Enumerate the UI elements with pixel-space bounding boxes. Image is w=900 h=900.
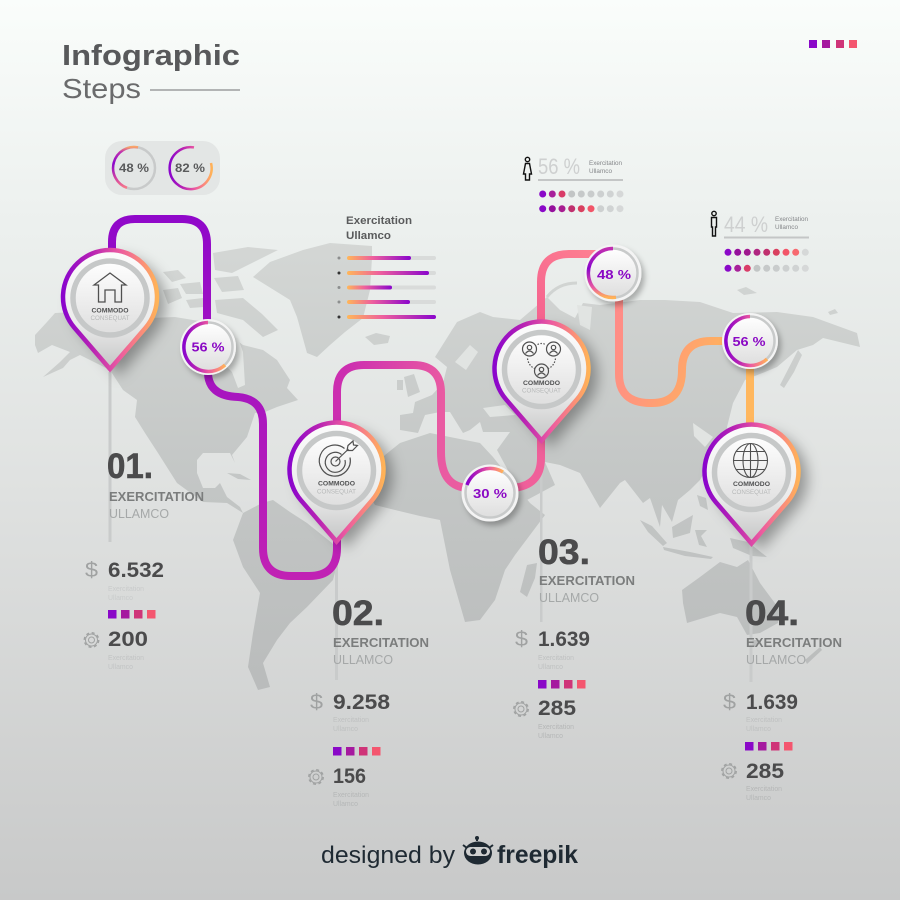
demographic panel 56 %: 56 % [538,154,580,179]
icon: person [712,211,716,236]
badge 48 % [584,244,642,302]
badge 56 % right [722,313,778,369]
bars panel: Ullamco [346,230,391,242]
step 03: Ullamco [538,662,563,671]
footer logo [321,836,578,869]
step 02: Ullamco [333,724,358,733]
step 04: Exercitation [746,715,782,724]
demographic panel 44 %: 44 % [724,212,768,237]
step 02 [309,594,429,808]
pin label: COMMODO [733,481,770,488]
pin label [732,481,771,496]
step 04: ULLAMCO [746,652,806,667]
step 02: ULLAMCO [333,652,393,667]
pin label: CONSEQUAT [90,315,130,322]
demographic panel 44 % [712,211,809,272]
step 04: $ [723,691,736,714]
step 01: Exercitation [108,584,144,593]
pin label: COMMODO [523,380,560,387]
step 03: Exercitation [538,653,574,662]
pin label: CONSEQUAT [732,489,771,496]
demographic panel 44 %: Exercitation [775,216,808,223]
badge 30 %: 30 % [473,486,507,501]
demographic panel 56 %: Exercitation [589,160,622,167]
pin 4: globe [704,425,798,544]
step 01: EXERCITATION [109,489,204,504]
step 04: 285 [746,760,784,783]
icon: gear [722,764,736,778]
icon: gear [84,633,99,647]
icon: target [319,441,358,476]
pin 2: target [290,423,384,542]
step 02: 02. [332,594,384,633]
step 03: Ullamco [538,731,563,740]
icon: person [524,157,532,180]
ring 48 %: 48 % [119,163,149,175]
step 01: Ullamco [108,662,133,671]
step 02: 156 [333,765,366,788]
pin label: COMMODO [92,308,128,314]
pin label: COMMODO [318,480,355,488]
pin label: CONSEQUAT [317,488,356,496]
step 02: Exercitation [333,715,369,724]
step 02: $ [310,691,323,714]
step 03: $ [515,628,528,651]
step 01 [84,447,204,671]
bars panel: Exercitation [346,215,412,227]
demographic panel 56 % [524,154,624,212]
icon: gear [309,770,323,784]
pin 1: house [63,250,157,369]
icon: house [94,273,126,302]
demographic panel 44 %: Ullamco [775,224,798,231]
badge 30 % [462,464,518,522]
step 01: Exercitation [108,653,144,662]
ring 82 %: 82 % [175,163,205,175]
step 02: Ullamco [333,799,358,808]
icon: globe [734,444,768,478]
step 04: EXERCITATION [746,635,842,650]
badge 56 % right: 56 % [732,334,766,349]
step 01: $ [85,559,98,582]
step 04: 04. [745,594,799,633]
step 03: EXERCITATION [539,573,635,588]
title [62,40,240,104]
step 02: EXERCITATION [333,635,429,650]
step 04: Ullamco [746,724,771,733]
footer logo: designed by [321,842,455,869]
step 03: 03. [538,533,590,572]
step 01: 01. [107,447,153,486]
icon: gear [514,702,528,716]
demographic panel 56 %: Ullamco [589,168,612,175]
badge 56 % left: 56 % [192,340,225,354]
step 03: 1.639 [538,628,590,651]
step 03: Exercitation [538,722,574,731]
step 02: Exercitation [333,790,369,799]
top right squares [809,40,857,48]
step 03 [514,533,635,740]
pin label: CONSEQUAT [522,388,561,394]
step 04: Exercitation [746,784,782,793]
bars panel [338,215,436,319]
step 01: 6.532 [108,559,164,582]
badge 56 % left [180,319,236,375]
title: Steps [62,73,141,104]
step 01: ULLAMCO [109,506,169,521]
step 03: ULLAMCO [539,590,599,605]
leader lines [108,372,752,682]
step 02: 9.258 [333,691,390,714]
panel: top percentage rings [105,141,220,195]
ribbon: route [112,219,750,576]
step 04: Ullamco [746,793,771,802]
pin label [90,308,130,322]
step 03: 285 [538,697,576,720]
pin 3: people [494,322,588,440]
icon: people network [522,342,560,378]
step 04: 1.639 [746,691,798,714]
pin label [522,380,561,394]
step 01: 200 [108,628,148,651]
step 01: Ullamco [108,593,133,602]
title: Infographic [62,40,240,72]
step 04 [722,594,842,802]
icon: freepik mascot [463,836,493,864]
badge 48 %: 48 % [597,267,631,282]
footer logo: freepik [497,841,578,869]
world map [35,243,860,690]
pin label [317,480,356,496]
